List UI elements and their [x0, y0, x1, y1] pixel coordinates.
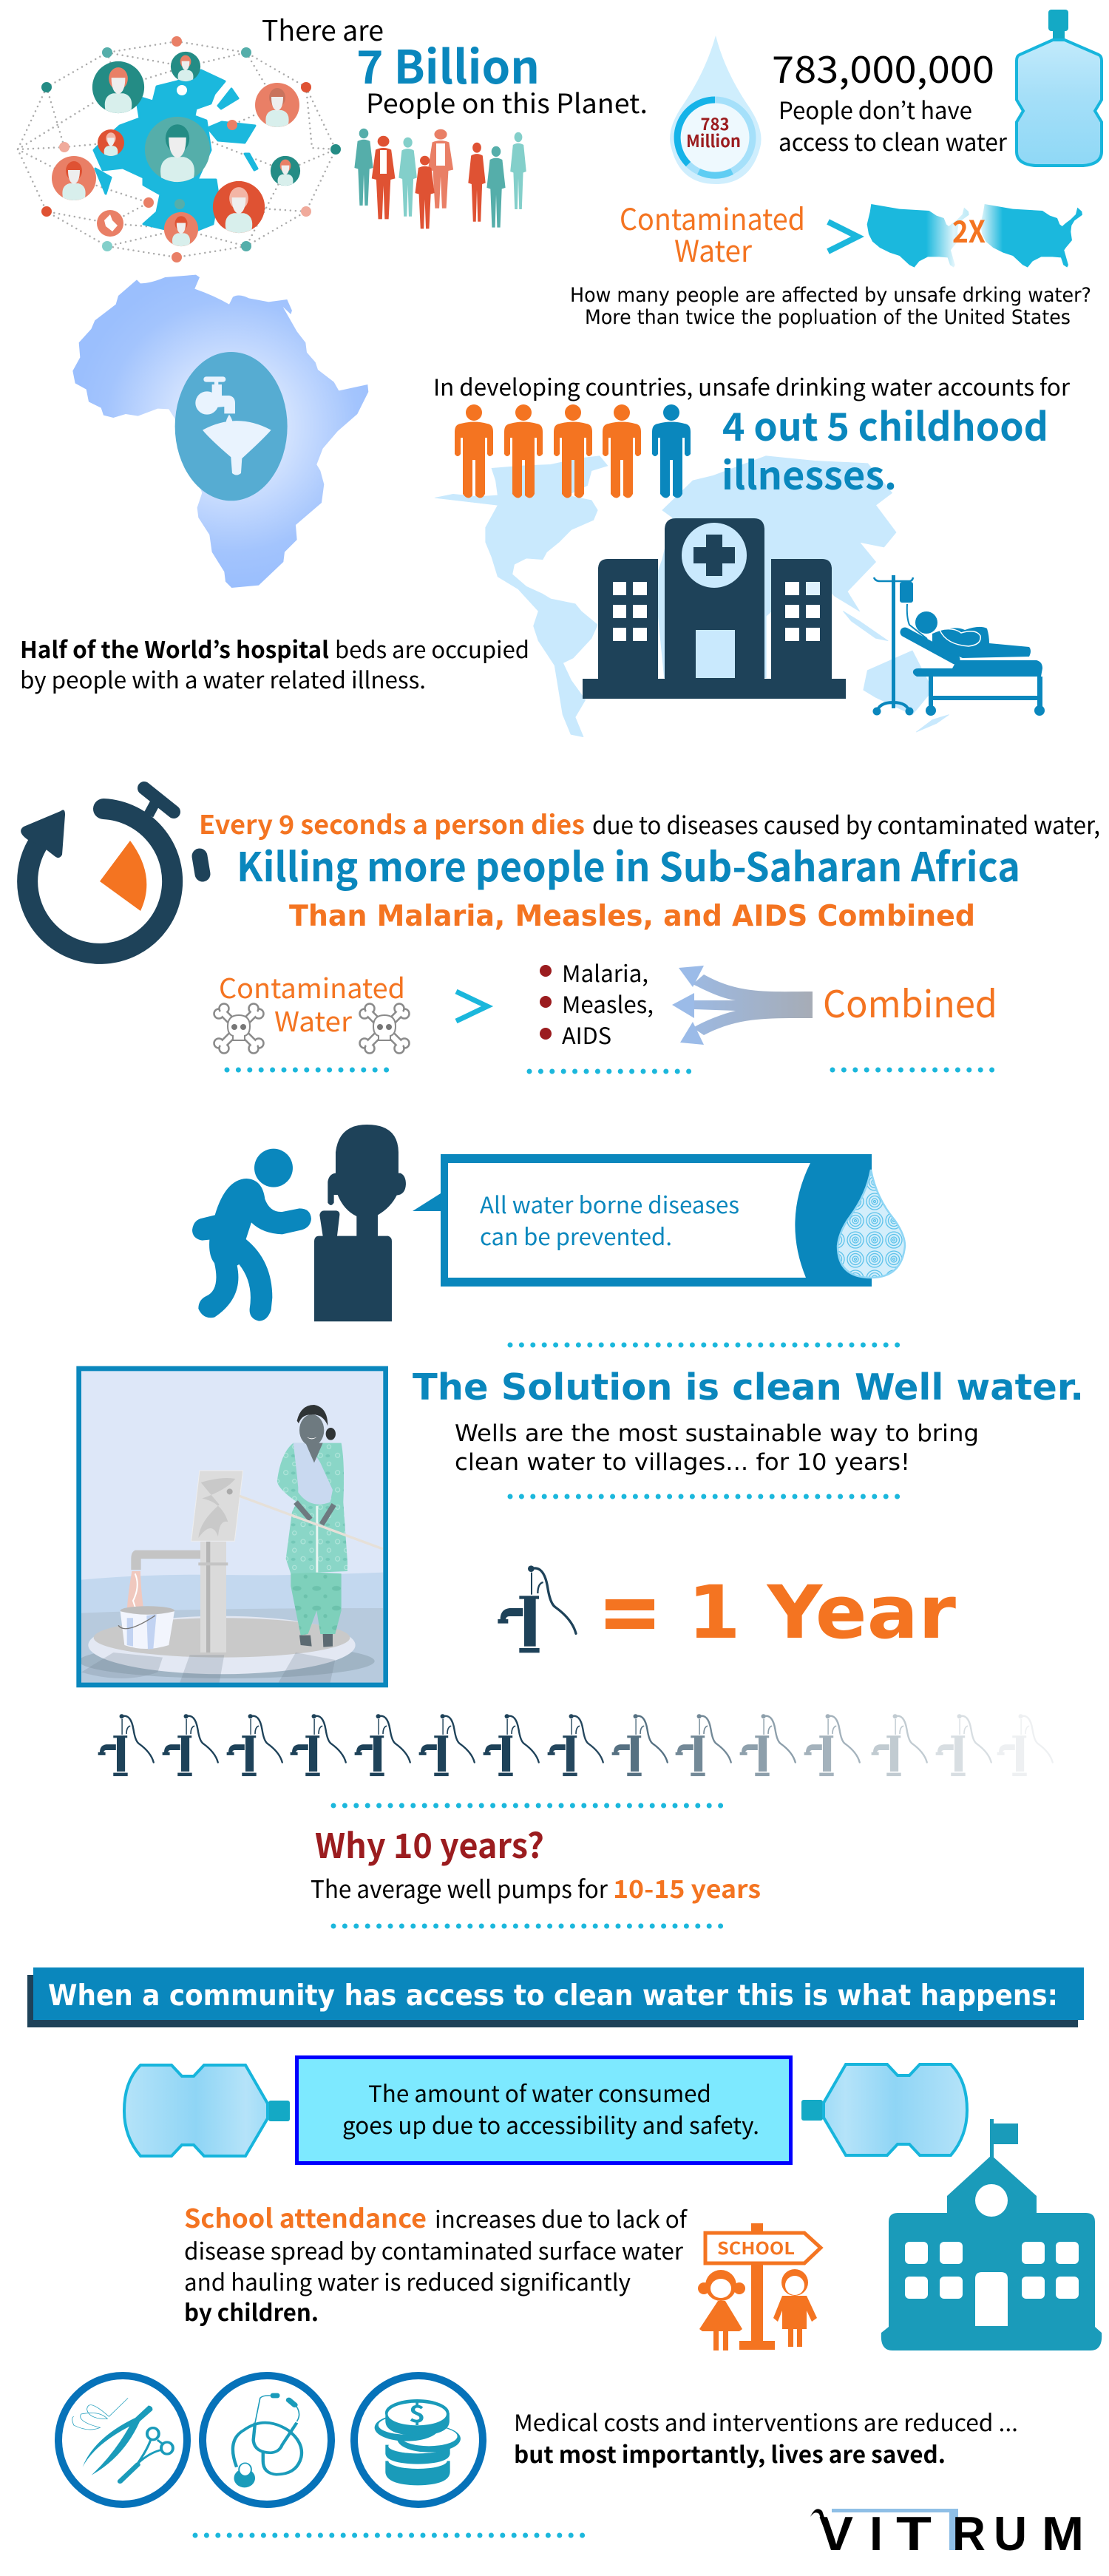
icon: skull left [214, 1004, 263, 1053]
text: half of world's hospital beds: by people with a water related illness. [20, 662, 426, 695]
world map highlight [177, 85, 187, 95]
school details [905, 2184, 1079, 2326]
icon: hand pump [498, 1565, 576, 1653]
text: medical costs: Medical costs and interventions are reduced ... [514, 2404, 1018, 2438]
text: how many people affected [570, 284, 1091, 329]
stat: 783,000,000: access to clean water [779, 124, 1008, 158]
stat: 783,000,000 [772, 41, 1008, 158]
logo: vitrum: M [1042, 2506, 1084, 2560]
heading: there are 7 billion: People on this Planet. [366, 83, 648, 121]
heading: there are 7 billion: There are [262, 8, 384, 49]
hospital door [696, 630, 735, 678]
text: medical costs: but most importantly, lives are saved. [514, 2436, 946, 2470]
greater than sign [456, 992, 487, 1021]
headline: every 9 seconds: Than Malaria, Measles, and AIDS Combined [289, 900, 975, 933]
africa map with faucet [72, 275, 368, 588]
badge: stethoscope [203, 2376, 331, 2504]
comparison: contaminated water vs US [620, 196, 1082, 271]
headline: every 9 seconds: Every 9 seconds a person dies [199, 804, 585, 842]
avatars [52, 52, 300, 246]
stat: 783,000,000: People don’t have [779, 92, 972, 126]
woman figure [277, 1405, 347, 1647]
heading: 4 out 5 childhood illnesses [722, 396, 1048, 501]
heading: there are 7 billion: 7 Billion [356, 30, 540, 97]
water cooler [314, 1125, 406, 1321]
water stream [127, 1571, 144, 1614]
icon: water bottle [1017, 10, 1102, 166]
text: wells sustainable: clean water to villages... for 10 years! [455, 1449, 910, 1476]
text: why 10 years [311, 1820, 761, 1905]
logo: vitrum: V [819, 2506, 853, 2560]
greater than sign [828, 222, 858, 251]
text: half of world's hospital beds [20, 631, 529, 695]
comparison: contaminated water vs US: Contaminated [620, 196, 805, 239]
icons: medical badges [58, 2376, 483, 2504]
text: why 10 years: 10-15 years [613, 1870, 761, 1905]
heading: 4 out 5 childhood illnesses: illnesses. [722, 445, 897, 501]
list: malaria measles aids: Measles, [562, 986, 654, 1020]
text: why 10 years: The average well pumps for [311, 1870, 608, 1905]
text: half of world's hospital beds: beds are occupied [335, 631, 529, 665]
globe: people network [18, 36, 341, 262]
comparison: contaminated water vs US: Water [674, 228, 752, 271]
text: combined: Combined [823, 975, 997, 1028]
stat: 783,000,000: 783,000,000 [772, 41, 994, 94]
text: school attendance: and hauling water is reduced significantly [184, 2264, 631, 2297]
icon: faucet and funnel [195, 376, 271, 475]
text: wells sustainable [455, 1420, 979, 1476]
text: school attendance: School attendance [184, 2198, 427, 2236]
callout: water borne diseases: can be prevented. [480, 1218, 672, 1252]
icon: bottle left [124, 2065, 290, 2156]
water drop with 783 million gauge: Million [686, 127, 741, 152]
headline: every 9 seconds: Killing more people in Sub-Saharan Africa [237, 835, 1020, 893]
badge: surgical tools [58, 2376, 187, 2504]
world map background [435, 456, 949, 737]
text: developing countries heading: In developing countries, unsafe drinking water accounts for [433, 369, 1071, 402]
headline: every 9 seconds [199, 804, 1100, 933]
logo: vitrum: I [869, 2506, 883, 2560]
text: how many people affected: How many people are affected by unsafe drking water? [570, 284, 1091, 307]
girl [698, 2270, 745, 2350]
callout box: water consumed: goes up due to accessibility and safety. [342, 2107, 759, 2141]
text: why 10 years: Why 10 years? [315, 1820, 544, 1868]
stopwatch wedge [100, 841, 146, 911]
callout: water borne diseases [413, 1154, 905, 1287]
icon: bottle right [801, 2064, 967, 2155]
bucket [121, 1606, 174, 1615]
icon row: 4 of 5 children [455, 404, 691, 498]
icon: school building [881, 2119, 1102, 2350]
banner: community access [27, 1967, 1084, 2027]
list: malaria measles aids: Malaria, [562, 955, 648, 989]
icon: patterned drop [838, 1170, 905, 1278]
oval badge [175, 352, 288, 501]
2x label: 2X [952, 207, 986, 251]
hospital windows [613, 582, 820, 641]
icon: man at water cooler [192, 1125, 406, 1321]
icon: school sign with children: SCHOOL [717, 2234, 795, 2260]
heading: there are 7 billion [262, 8, 648, 121]
us maps [867, 204, 1082, 268]
pump handle [240, 1496, 383, 1549]
water drop with 783 million gauge [670, 35, 762, 184]
icon: school sign with children [698, 2223, 821, 2350]
pump column [200, 1542, 226, 1653]
list: malaria measles aids [540, 955, 654, 1051]
comparison: contaminated water with skulls: Contaminated [219, 966, 405, 1006]
callout box: water consumed [297, 2057, 791, 2163]
heading: 4 out 5 childhood illnesses: 4 out 5 childhood [722, 396, 1048, 452]
text: wells sustainable: Wells are the most sustainable way to bring [455, 1420, 979, 1447]
icon: hospital [583, 518, 846, 699]
icon: skull right [359, 1004, 410, 1053]
text: medical costs [514, 2404, 1018, 2470]
world map shape [94, 70, 257, 234]
badge: coins [354, 2376, 483, 2504]
text: equals 1 year: 1 Year [688, 1570, 956, 1655]
text: school attendance: by children. [184, 2294, 319, 2328]
text: school attendance: increases due to lack of [435, 2201, 688, 2234]
network nodes [41, 36, 341, 262]
comparison: contaminated water with skulls: Water [274, 1000, 353, 1040]
water drop with 783 million gauge: 783 [701, 110, 729, 135]
logo: vitrum [810, 2506, 1084, 2560]
photo frame [79, 1369, 386, 1685]
icon: stopwatch [21, 788, 203, 954]
callout: water borne diseases: All water borne diseases [480, 1187, 739, 1220]
logo: vitrum: R [952, 2506, 986, 2560]
hospital emblem [682, 523, 747, 588]
photo: woman at well pump [79, 1369, 386, 1685]
heading: the solution: The Solution is clean Well water. [413, 1366, 1084, 1409]
text: how many people affected: More than twice the popluation of the United States [585, 306, 1071, 329]
badge: coins: $ [409, 2396, 425, 2430]
crowd silhouettes [354, 129, 526, 228]
callout box: water consumed: The amount of water consumed [368, 2075, 711, 2109]
logo: vitrum: U [994, 2506, 1027, 2560]
pump row: fading years [98, 1714, 1053, 1776]
logo: vitrum: T [896, 2506, 932, 2560]
comparison: contaminated water with skulls [214, 966, 410, 1053]
well platform [88, 1616, 356, 1674]
text: school attendance [184, 2198, 688, 2328]
text: half of world's hospital beds: Half of the World’s hospital [20, 631, 329, 665]
boy [773, 2269, 817, 2347]
arrows: three-way split [672, 966, 813, 1045]
text: school attendance: disease spread by contaminated surface water [184, 2233, 684, 2266]
icon: patient in hospital bed [872, 575, 1045, 716]
list: malaria measles aids: AIDS [562, 1017, 611, 1051]
